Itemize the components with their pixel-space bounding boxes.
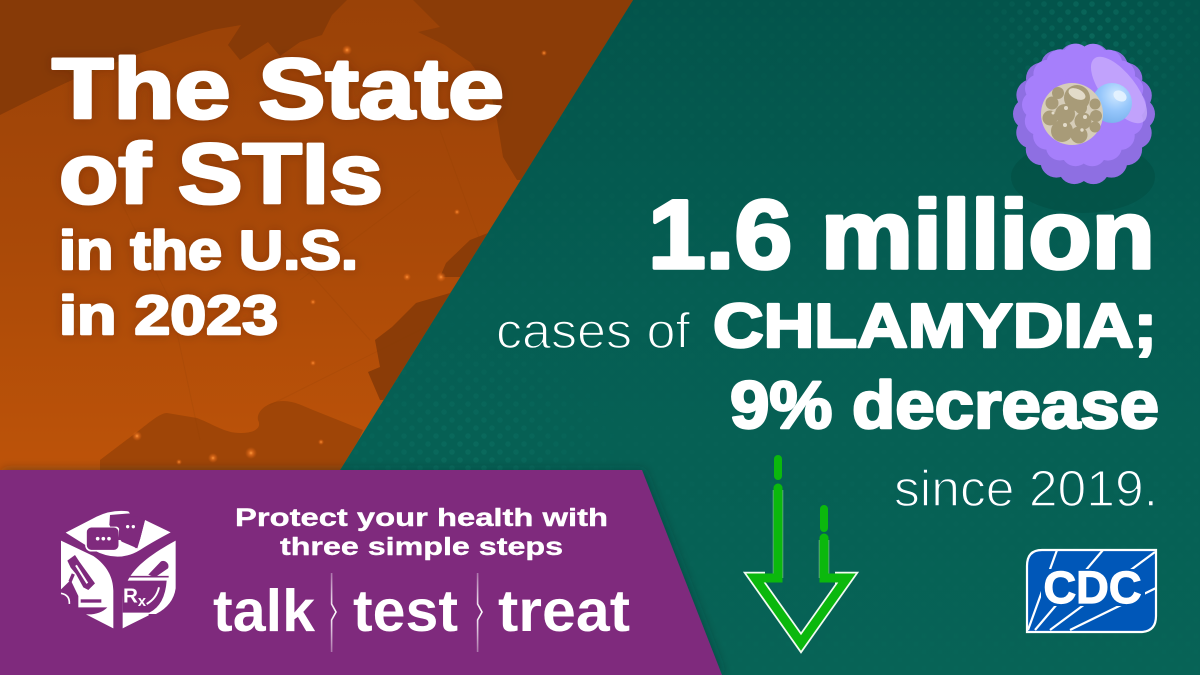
statistic: 9% decrease: 9% decrease [730, 368, 1159, 443]
logo: CDC [1027, 550, 1156, 632]
logo: CDC: CDC [1044, 562, 1142, 613]
panel: orange map background [0, 0, 640, 470]
text: talk test treat [213, 578, 630, 644]
tan inclusion sphere [1041, 83, 1103, 145]
text: protect your health [235, 504, 608, 561]
text: talk test treat: test [353, 578, 458, 644]
text: cases of CHLAMYDIA: CHLAMYDIA; [713, 292, 1157, 361]
map: dark Gulf of Mexico area [100, 401, 363, 470]
cube left face: microscope [61, 541, 113, 628]
cube top face: speech bubbles [66, 511, 171, 557]
cube right face: mortar and pestle: x [138, 594, 147, 610]
cell outer scalloped membrane [1029, 57, 1139, 169]
translucent highlight [1081, 48, 1157, 132]
background: teal panel [364, 1, 1199, 470]
logo rays [1028, 550, 1156, 630]
text: protect your health: Protect your health with [235, 504, 608, 532]
map: dark Atlantic area [368, 0, 640, 400]
statistic: 1.6 million: 1.6 million [648, 180, 1155, 289]
map: dark area north of the U.S. [0, 0, 347, 115]
text: protect your health: three simple steps [280, 533, 563, 561]
title: in 2023 [59, 284, 278, 346]
icon: talk test treat cube [61, 511, 176, 628]
icon: chlamydia cell [1011, 48, 1157, 213]
icon: green down arrow [755, 459, 847, 643]
title: of STIs [59, 127, 383, 222]
map: glowing city sparks [132, 45, 547, 465]
cube right face: mortar and pestle [123, 541, 176, 628]
panel: purple banner [0, 470, 722, 675]
text: talk test treat: treat [498, 578, 630, 644]
blue sphere [1092, 83, 1132, 123]
title: in the U.S. [59, 219, 358, 281]
map: faint state borders [120, 130, 480, 440]
text: cases of CHLAMYDIA [496, 292, 1157, 361]
cell shadow [1011, 141, 1155, 213]
title [52, 42, 504, 346]
text: since 2019: since 2019. [894, 460, 1158, 517]
title: The State [52, 42, 504, 137]
text: cases of CHLAMYDIA: cases of [496, 303, 690, 359]
cube right face: mortar and pestle: R [123, 585, 138, 608]
text: talk test treat: talk [213, 578, 315, 644]
dividers between talk, test and treat [332, 573, 482, 652]
